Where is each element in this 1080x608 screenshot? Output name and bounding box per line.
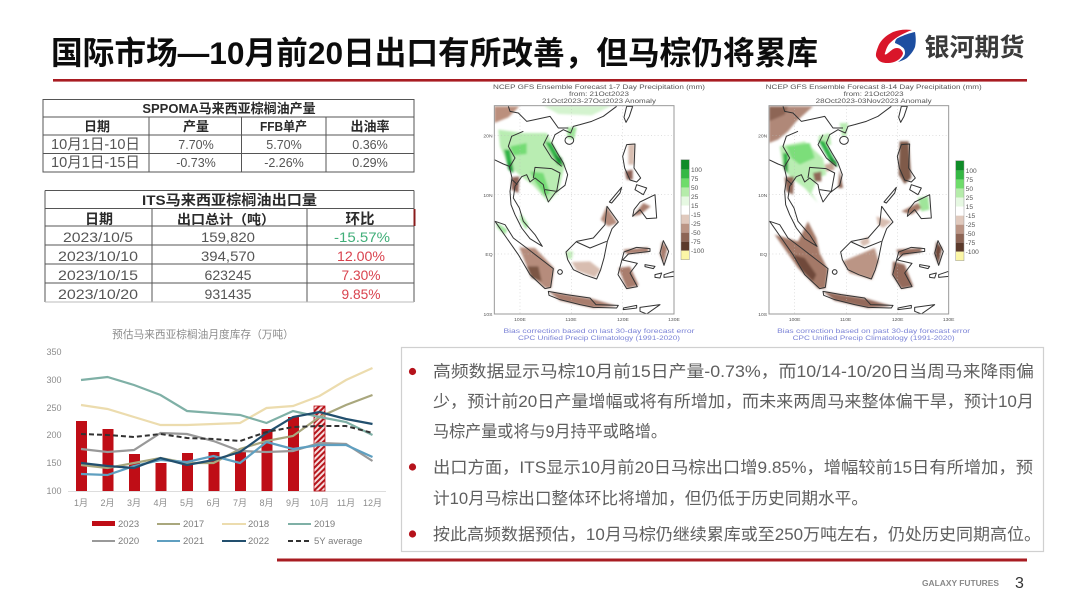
x axis labels: 4月 xyxy=(153,498,168,508)
x axis labels: 3月 xyxy=(127,498,141,508)
bullet 1: 马棕产量或将与9月持平或略增。 xyxy=(433,422,667,441)
map 2 colour legend: 25 xyxy=(966,195,973,202)
bullet 1: 少，预计前20日产量增幅或将有所增加，而未来两周马来整体偏干旱，预计10月 xyxy=(433,392,1034,411)
map 1 axis ticks: 110E xyxy=(565,317,577,323)
map 1 header xyxy=(493,84,705,105)
page number: 3 xyxy=(1015,575,1024,592)
x axis labels: 12月 xyxy=(363,498,382,508)
map 2 axis ticks: 110E xyxy=(840,317,852,323)
table: SPPOMA production: 5.70% xyxy=(266,138,302,152)
bar: October estimate xyxy=(314,406,325,491)
map 2 colour legend xyxy=(956,161,979,261)
map 1 axis ticks xyxy=(483,133,680,323)
table: SPPOMA production: 10月1日-10日 xyxy=(51,137,140,153)
table: ITS exports: -15.57% xyxy=(334,230,390,245)
table: ITS exports: 2023/10/10 xyxy=(58,249,138,264)
map 2 axis ticks: 100E xyxy=(789,317,801,323)
y axis labels: 250 xyxy=(46,403,62,413)
table: ITS exports: 623245 xyxy=(204,268,252,283)
x axis labels: 10月 xyxy=(310,498,329,508)
map 1 colour legend: -25 xyxy=(691,221,701,228)
chart: Malaysia palm oil monthly stocks xyxy=(46,328,386,547)
chart legend: 2017 xyxy=(183,519,204,530)
map 2 axis ticks: 10N xyxy=(758,193,768,199)
logo: Galaxy Futures: 银河期货 xyxy=(924,34,1025,62)
top rule xyxy=(53,79,1027,82)
map 1 colour legend xyxy=(681,160,705,260)
map 1 colour legend: 75 xyxy=(691,176,699,183)
map 2 colour legend: -25 xyxy=(966,222,976,229)
map 1 header: NCEP GFS Ensemble Forecast 1-7 Day Precipitation (mm) xyxy=(493,84,705,91)
table: ITS exports: 394,570 xyxy=(201,249,255,264)
map: 1-7 day precipitation xyxy=(483,84,705,342)
table: SPPOMA production: SPPOMA马来西亚棕榈油产量 xyxy=(142,101,316,116)
map 1 colour legend: 25 xyxy=(691,194,699,201)
panel: commentary box xyxy=(402,348,1044,552)
map 1 axis ticks: EQ xyxy=(485,252,493,258)
map 2 frame xyxy=(769,106,949,314)
bullet 3: 按此高频数据预估，10月马棕仍继续累库或至250万吨左右，仍处历史同期高位。 xyxy=(433,525,1041,544)
map 1 colour legend: -100 xyxy=(691,248,705,255)
map 1 colour legend: -50 xyxy=(691,230,701,237)
map 1 frame xyxy=(494,106,674,314)
map 2 axis ticks: 130E xyxy=(943,317,955,323)
bottom rule xyxy=(277,558,1027,562)
table: ITS exports: 9.85% xyxy=(342,287,380,302)
map 1 header: 21Oct2023-27Oct2023 Anomaly xyxy=(542,98,657,105)
table: ITS exports: 环比 xyxy=(346,211,374,228)
table: SPPOMA production: 7.70% xyxy=(178,138,214,152)
map 1 axis ticks: 120E xyxy=(617,317,629,323)
line 2020 xyxy=(81,433,372,461)
map 1 colour legend: -15 xyxy=(691,212,701,219)
x axis labels: 6月 xyxy=(206,498,221,508)
table: ITS exports: 7.30% xyxy=(342,268,380,283)
y axis labels: 350 xyxy=(46,347,62,357)
x axis labels: 11月 xyxy=(337,498,355,508)
table: ITS exports: 2023/10/15 xyxy=(58,268,138,283)
map 2 colour legend: 75 xyxy=(966,177,973,184)
table: ITS exports xyxy=(45,190,416,302)
map 1 axis ticks: 20N xyxy=(483,133,493,139)
x axis labels: 5月 xyxy=(180,498,194,508)
map 1 colour legend: -75 xyxy=(691,239,701,246)
line 2017 xyxy=(81,395,372,468)
map 2 colour legend: 15 xyxy=(966,204,973,211)
map 1 colour legend: 15 xyxy=(691,203,699,210)
logo: Galaxy Futures xyxy=(876,30,1025,63)
map 2 colour legend: 100 xyxy=(966,168,977,175)
chart title: 预估马来西亚棕榈油月度库存（万吨） xyxy=(112,328,294,341)
map 2 colour legend: -75 xyxy=(966,240,976,247)
map 1 axis ticks: 130E xyxy=(668,317,680,323)
chart legend: 2022 xyxy=(248,536,269,547)
map 2 header: from: 21Oct2023 xyxy=(844,91,904,98)
x axis labels: 2月 xyxy=(100,498,115,508)
map 1 header: from: 21Oct2023 xyxy=(569,91,629,98)
map 2 colour legend: -50 xyxy=(966,231,976,238)
y axis labels: 100 xyxy=(46,486,62,496)
bullet 2 xyxy=(409,458,1033,508)
map 2 axis ticks: 20N xyxy=(758,133,768,139)
x axis labels xyxy=(74,498,382,508)
table: SPPOMA production: 0.36% xyxy=(352,138,388,152)
map 1 axis ticks: 10N xyxy=(483,193,493,199)
map 2 footer xyxy=(777,328,971,342)
map 2 axis ticks: EQ xyxy=(760,252,767,258)
chart legend: 2018 xyxy=(248,519,269,530)
table: SPPOMA production: 日期 xyxy=(84,119,110,134)
bullet 1 xyxy=(409,362,1034,441)
map 1 colour legend: 50 xyxy=(691,185,699,192)
chart legend: 2023 xyxy=(118,519,139,530)
map 2 colour legend: 50 xyxy=(966,186,973,193)
map 1 colour legend: 100 xyxy=(691,167,702,174)
table: ITS exports: 2023/10/5 xyxy=(63,230,133,245)
map 2 anomaly field xyxy=(769,106,949,314)
map 2 footer: Bias correction based on past 30-day forecast error xyxy=(777,328,971,335)
table: SPPOMA production: -0.73% xyxy=(176,156,216,170)
icon: red and blue swirl xyxy=(876,30,916,63)
footer brand: GALAXY FUTURES xyxy=(922,579,1000,588)
line 2021 xyxy=(81,442,372,475)
y axis labels: 300 xyxy=(46,375,62,385)
chart legend: 5Y average xyxy=(314,536,362,547)
chart legend xyxy=(92,519,362,547)
map 2 axis ticks xyxy=(758,133,955,323)
x axis labels: 7月 xyxy=(233,498,247,508)
line 2018 xyxy=(81,368,372,425)
table: SPPOMA production: 0.29% xyxy=(352,156,388,170)
line 2022 xyxy=(81,412,372,468)
map 1 axis ticks: 10S xyxy=(484,312,493,318)
table: ITS exports: 931435 xyxy=(204,287,252,302)
title: 国际市场—10月前20日出口有所改善，但马棕仍将累库 xyxy=(51,35,818,71)
map 2 colour legend: -15 xyxy=(966,213,976,220)
table: SPPOMA production: -2.26% xyxy=(264,156,304,170)
x axis labels: 8月 xyxy=(259,498,274,508)
y axis labels: 150 xyxy=(46,458,62,468)
table: ITS exports: ITS马来西亚棕榈油出口量 xyxy=(142,192,317,208)
map 1 anomaly field xyxy=(494,106,674,314)
chart legend: 2020 xyxy=(118,536,139,547)
table: ITS exports: 159,820 xyxy=(201,230,255,245)
map 1 footer xyxy=(503,328,696,342)
map 2 header: NCEP GFS Ensemble Forecast 8-14 Day Precipitation (mm) xyxy=(766,84,982,91)
line 2019 xyxy=(81,377,372,435)
bullet 2: 计10月马棕出口整体环比将增加，但仍低于历史同期水平。 xyxy=(433,489,868,508)
map 2 header: 28Oct2023-03Nov2023 Anomaly xyxy=(816,98,933,105)
map 2 colour legend: -100 xyxy=(966,249,979,256)
bullet 1: 高频数据显示马棕10月前15日产量-0.73%，而10/14-10/20日当周马来降雨偏 xyxy=(433,362,1034,381)
map 1 axis ticks: 100E xyxy=(514,317,526,323)
table: ITS exports: 出口总计（吨） xyxy=(177,212,275,227)
x axis labels: 9月 xyxy=(286,498,300,508)
chart legend: 2019 xyxy=(314,519,335,530)
table: SPPOMA production: 出油率 xyxy=(350,119,390,134)
bars 2023 xyxy=(76,417,299,491)
map 1 footer: Bias correction based on last 30-day forecast error xyxy=(503,328,696,335)
table: SPPOMA production: 10月1日-15日 xyxy=(51,155,140,171)
map 2 footer: CPC Unified Precip Climatology (1991-2020) xyxy=(793,335,955,342)
y axis labels: 200 xyxy=(46,430,62,440)
table: ITS exports: 12.00% xyxy=(337,249,385,264)
map 2 axis ticks: 120E xyxy=(892,317,904,323)
line 5Y average xyxy=(81,426,372,441)
bullet 2: 出口方面，ITS显示10月前20日马棕出口增9.85%，增幅较前15日有所增加，预 xyxy=(433,458,1033,477)
y axis labels xyxy=(46,347,62,496)
map 2 axis ticks: 10S xyxy=(758,312,768,318)
map: 8-14 day precipitation xyxy=(758,84,982,342)
table: SPPOMA production: 产量 xyxy=(183,119,209,134)
table: ITS exports: 2023/10/20 xyxy=(58,287,138,302)
map 2 header xyxy=(766,84,982,105)
chart legend: 2021 xyxy=(183,536,204,547)
table: ITS exports: 日期 xyxy=(85,211,113,227)
map 1 footer: CPC Unified Precip Climatology (1991-2020) xyxy=(518,335,680,342)
table: SPPOMA production xyxy=(43,100,414,172)
x axis labels: 1月 xyxy=(74,498,88,508)
table: SPPOMA production: FFB单产 xyxy=(260,119,307,134)
